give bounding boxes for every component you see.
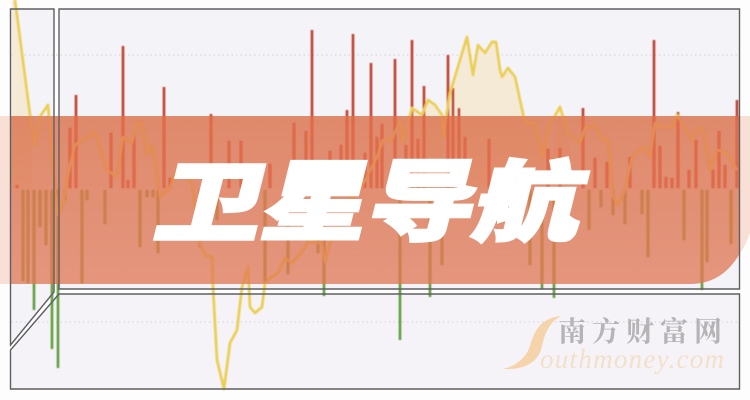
panel: orange title band bbox=[10, 116, 740, 284]
watermark: domain: outhmoney.com bbox=[540, 344, 724, 374]
title: 卫星导航 bbox=[146, 133, 601, 259]
panel: pale band ends bbox=[0, 116, 750, 284]
watermark: swoosh logo bbox=[503, 316, 561, 369]
chart tinted through band bbox=[16, 116, 738, 284]
watermark: chinese name: 南方财富网 bbox=[558, 310, 722, 350]
yellow area fill under line bbox=[12, 0, 575, 189]
red up bars bbox=[17, 30, 737, 188]
green down bars bbox=[23, 190, 731, 368]
